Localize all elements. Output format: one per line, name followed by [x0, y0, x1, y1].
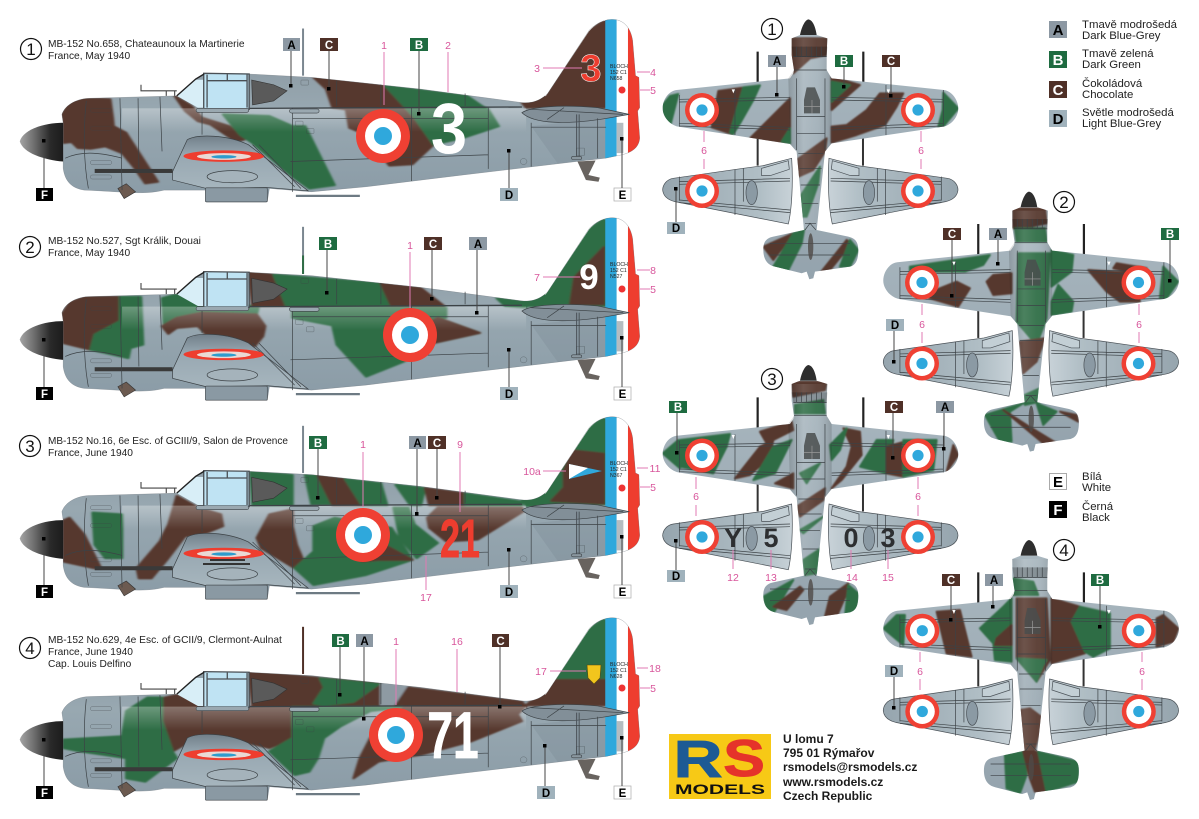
callouts side 3	[36, 436, 661, 604]
callouts top 4: C	[947, 575, 955, 587]
caption 1: MB-152 No.658, Chateaunoux la Martinerie	[48, 39, 245, 50]
callouts top 1: A	[773, 56, 781, 68]
callouts top 4: D	[890, 666, 898, 678]
caption 3: France, June 1940	[48, 448, 133, 459]
callouts top 1: 6	[701, 145, 707, 157]
callouts side 1: 4	[650, 67, 656, 79]
callouts side 4: 5	[650, 683, 656, 695]
address: 795 01 Rýmařov	[783, 746, 875, 760]
caption 4: France, June 1940	[48, 647, 133, 658]
address: U lomu 7	[783, 732, 834, 746]
callouts side 3: 10a	[523, 466, 541, 478]
roundels	[905, 614, 1156, 728]
callouts side 1: 5	[650, 85, 656, 97]
legend white and black: Bílá	[1082, 471, 1102, 483]
callouts side 3: C	[433, 438, 441, 450]
fin number 9: 9	[579, 258, 599, 297]
side view 3	[20, 414, 645, 599]
callouts top 1: B	[840, 56, 848, 68]
rudder markings: BLOCH	[610, 461, 628, 467]
legend: Světle modrošedá	[1082, 107, 1174, 119]
rudder markings: 152 C1	[610, 668, 627, 674]
legend white and black: F	[1053, 502, 1063, 519]
legend: Dark Blue-Grey	[1082, 30, 1161, 42]
top view 1	[663, 19, 958, 279]
rudder markings: N658	[610, 76, 623, 82]
legend white and black: E	[1053, 474, 1063, 491]
logo	[669, 730, 771, 799]
callouts side 1: D	[505, 190, 513, 202]
rudder markings: N628	[610, 674, 623, 680]
callouts top 4: A	[990, 575, 998, 587]
legend: Chocolate	[1082, 89, 1133, 101]
rudder markings	[610, 662, 628, 692]
callouts top 2	[886, 228, 1179, 364]
caption 2: France, May 1940	[48, 248, 130, 259]
legend: Tmavě modrošedá	[1082, 19, 1178, 31]
underwing letters: 5	[763, 523, 779, 553]
top view 2	[883, 192, 1179, 452]
callouts top 3: A	[941, 402, 949, 414]
callouts side 3: B	[314, 438, 322, 450]
callouts top 2: A	[994, 229, 1002, 241]
roundel	[356, 109, 410, 163]
caption 3	[20, 436, 288, 459]
fuselage number 3: 3	[431, 89, 467, 169]
callouts side 1: A	[287, 40, 296, 52]
callouts side 2: B	[324, 239, 332, 251]
callouts side 1: C	[325, 40, 333, 52]
callouts top 4	[885, 574, 1145, 710]
callouts side 1: E	[619, 190, 627, 202]
callouts side 3: D	[505, 587, 513, 599]
rudder markings: 152 C1	[610, 268, 627, 274]
legend: Light Blue-Grey	[1082, 118, 1161, 130]
callouts top 1	[667, 55, 924, 235]
caption 1: France, May 1940	[48, 51, 130, 62]
rudder markings	[610, 262, 628, 292]
callouts side 3: A	[413, 438, 422, 450]
callouts top 3	[667, 401, 954, 584]
top 3 number	[762, 368, 782, 390]
callouts top 3: 6	[693, 491, 699, 503]
callouts top 2: B	[1166, 229, 1174, 241]
callouts side 3: 5	[650, 482, 656, 494]
roundels	[905, 266, 1156, 380]
rudder markings: 152 C1	[610, 467, 627, 473]
callouts side 4: F	[41, 788, 48, 800]
rudder markings: BLOCH	[610, 662, 628, 668]
legend white and black	[1049, 471, 1114, 524]
callouts side 2: 1	[407, 240, 413, 252]
caption 3: 3	[25, 437, 35, 456]
legend: B	[1053, 52, 1064, 69]
callouts side 1: 1	[381, 40, 387, 52]
callouts side 4: E	[619, 788, 627, 800]
callouts side 4	[36, 634, 661, 800]
callouts side 4: C	[496, 636, 505, 648]
underwing letters: 0	[843, 523, 859, 553]
callouts top 3: 14	[846, 572, 858, 584]
legend white and black: Black	[1082, 512, 1110, 524]
legend white and black: White	[1082, 482, 1111, 494]
roundel	[383, 308, 437, 362]
top 4 number: 4	[1059, 541, 1069, 560]
legend: Tmavě zelená	[1082, 48, 1154, 60]
callouts side 2: F	[41, 389, 48, 401]
fin number 3: 3	[580, 48, 602, 90]
callouts side 1: F	[41, 190, 48, 202]
callouts side 2: D	[505, 389, 513, 401]
callouts top 1: D	[672, 223, 680, 235]
callouts side 2: E	[619, 389, 627, 401]
logo: R	[674, 730, 722, 788]
callouts side 2	[36, 237, 656, 401]
roundels	[685, 93, 935, 208]
callouts top 4: B	[1096, 575, 1104, 587]
address: www.rsmodels.cz	[782, 775, 883, 789]
callouts side 3: E	[619, 587, 627, 599]
callouts top 3: B	[674, 402, 682, 414]
callouts side 2: 5	[650, 284, 656, 296]
address: rsmodels@rsmodels.cz	[783, 760, 917, 774]
rudder markings: BLOCH	[610, 64, 628, 70]
rudder markings: N367	[610, 473, 623, 479]
callouts side 3: F	[41, 587, 48, 599]
roundels	[685, 438, 935, 554]
callouts side 4: 1	[393, 636, 399, 648]
fin pennant	[569, 464, 602, 479]
logo: MODELS	[675, 781, 765, 797]
address: Czech Republic	[783, 789, 873, 803]
caption 2: 2	[25, 238, 35, 257]
logo: S	[723, 730, 765, 788]
callouts top 3: 13	[765, 572, 777, 584]
callouts top 3: D	[672, 571, 680, 583]
underwing letters: Y	[724, 523, 742, 553]
callouts side 4: 16	[451, 636, 463, 648]
legend: Dark Green	[1082, 59, 1141, 71]
callouts top 3: C	[890, 402, 898, 414]
caption 4: 4	[25, 639, 35, 658]
legend: Čokoládová	[1082, 77, 1143, 90]
top 1 number: 1	[767, 20, 777, 39]
callouts side 1: B	[415, 40, 423, 52]
callouts side 3: 1	[360, 439, 366, 451]
callouts side 2: 7	[534, 272, 540, 284]
legend	[1049, 19, 1178, 130]
callouts side 4: 18	[649, 663, 661, 675]
callouts top 1: C	[887, 56, 895, 68]
underwing letters: 3	[880, 523, 896, 553]
caption 2	[20, 236, 201, 259]
callouts top 1: 6	[918, 145, 924, 157]
callouts side 4: B	[336, 636, 345, 648]
legend: D	[1053, 111, 1064, 128]
callouts top 3: 15	[882, 572, 894, 584]
address	[782, 732, 917, 803]
underwing marking	[203, 560, 250, 564]
callouts side 3: 17	[420, 592, 432, 604]
rudder markings: N527	[610, 274, 623, 280]
callouts side 4: A	[360, 636, 369, 648]
top 2 number	[1054, 192, 1074, 212]
rudder markings	[610, 64, 628, 94]
callouts side 2: 8	[650, 265, 656, 277]
caption 4: Cap. Louis Delfino	[48, 659, 132, 670]
top 4 number	[1054, 540, 1074, 560]
callouts side 3: 9	[457, 439, 463, 451]
legend white and black: Černá	[1082, 500, 1114, 513]
rudder markings: BLOCH	[610, 262, 628, 268]
roundel	[369, 708, 423, 762]
callouts top 2: 6	[1136, 319, 1142, 331]
caption 4: MB-152 No.629, 4e Esc. of GCII/9, Clermont-Aulnat	[48, 635, 282, 646]
roundel	[336, 508, 390, 562]
callouts top 2: D	[891, 320, 899, 332]
callouts side 1	[36, 38, 656, 202]
callouts top 2: 6	[919, 319, 925, 331]
callouts side 3: 11	[650, 463, 661, 475]
top view 4	[883, 540, 1179, 800]
callouts side 1: 2	[445, 40, 451, 52]
callouts top 3: 12	[727, 572, 739, 584]
side view 2	[20, 215, 645, 400]
top 1 number	[762, 18, 782, 40]
callouts side 4: 17	[535, 666, 547, 678]
callouts top 3: 6	[915, 491, 921, 503]
rudder markings: 152 C1	[610, 70, 627, 76]
callouts top 4: 6	[1139, 666, 1145, 678]
callouts side 4: D	[542, 788, 550, 800]
caption 1: 1	[26, 40, 36, 59]
caption 4	[20, 635, 282, 670]
fin badge	[587, 665, 601, 684]
callouts side 2: A	[474, 239, 482, 251]
underwing letters	[724, 523, 896, 553]
caption 1	[20, 38, 245, 62]
callouts side 2: C	[429, 239, 437, 251]
caption 2: MB-152 No.527, Sgt Králik, Douai	[48, 236, 201, 247]
fuselage number 71: 71	[427, 699, 479, 773]
top 2 number: 2	[1059, 193, 1069, 212]
legend: A	[1053, 22, 1064, 39]
caption 3: MB-152 No.16, 6e Esc. of GCIII/9, Salon de Provence	[48, 436, 288, 447]
side view 1	[20, 17, 645, 202]
callouts side 1: 3	[534, 63, 540, 75]
callouts top 4: 6	[917, 666, 923, 678]
side view 4	[20, 615, 645, 800]
callouts top 2: C	[948, 229, 956, 241]
rudder markings	[610, 461, 628, 492]
legend: C	[1053, 82, 1064, 99]
top 3 number: 3	[767, 370, 777, 389]
fuselage number 21: 21	[440, 509, 480, 569]
top view 3	[663, 365, 958, 625]
